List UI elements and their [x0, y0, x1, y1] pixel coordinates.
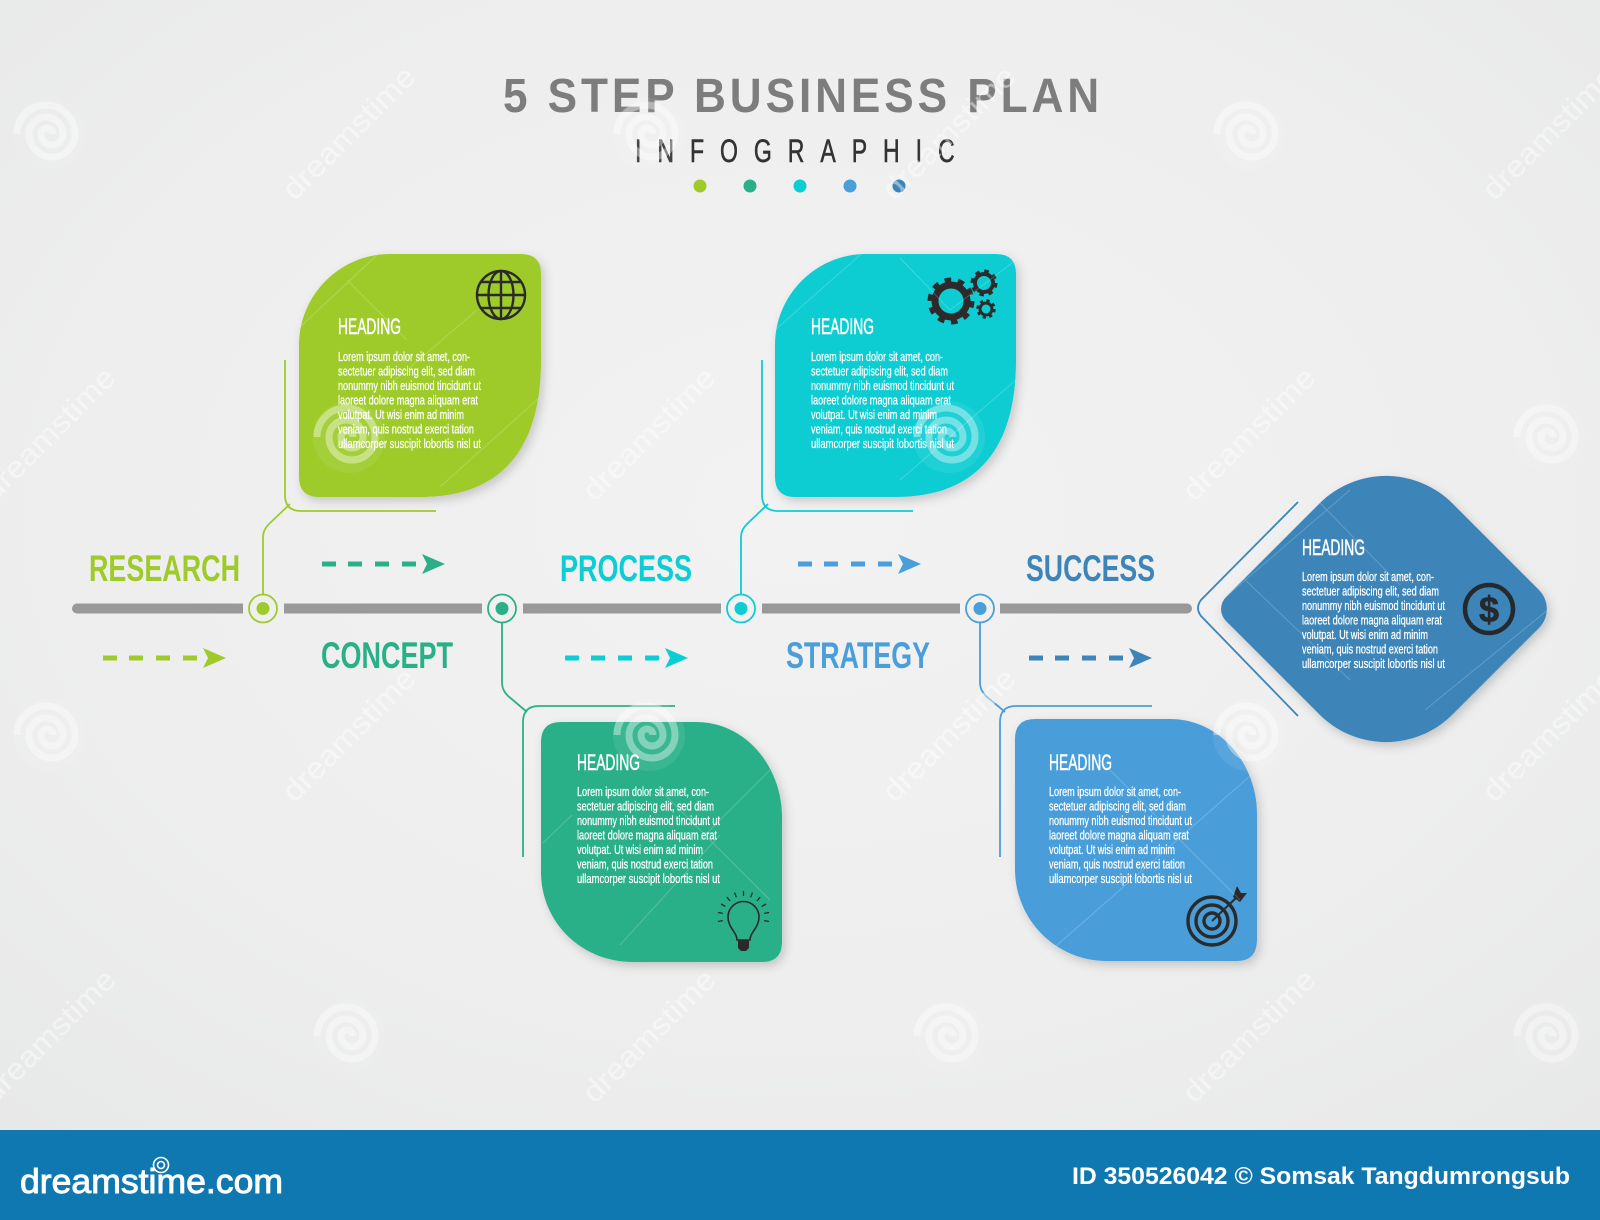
heading: HEADING [577, 750, 640, 775]
heading: HEADING [1302, 535, 1365, 560]
body text: laoreet dolore magna aliquam erat [1302, 614, 1442, 628]
body text: nonummy nibh euismod tincidunt ut [1302, 599, 1445, 613]
body text [1049, 785, 1192, 886]
panel: process card [775, 254, 1016, 497]
body text: sectetuer adipiscing elit, sed diam [577, 800, 714, 814]
body text: ullamcorper suscipit lobortis nisl ut [1049, 872, 1192, 886]
body text: ullamcorper suscipit lobortis nisl ut [811, 437, 954, 451]
label: strategy: STRATEGY [786, 635, 930, 676]
icon: globe [477, 271, 525, 319]
body text: ullamcorper suscipit lobortis nisl ut [577, 872, 720, 886]
body text [338, 350, 481, 451]
node 4 with connector [966, 594, 1152, 857]
image credit: ID 350526042 © Somsak Tangdumrongsub [1072, 1163, 1570, 1190]
body text [811, 350, 954, 451]
body text: laoreet dolore magna aliquam erat [338, 394, 478, 408]
arrow 4 [798, 554, 921, 574]
body text [1302, 570, 1445, 671]
chevron outline [1198, 502, 1298, 716]
body text: sectetuer adipiscing elit, sed diam [811, 364, 948, 378]
label: success: SUCCESS [1026, 548, 1155, 589]
heading: HEADING [1049, 750, 1112, 775]
body text: Lorem ipsum dolor sit amet, con- [1049, 785, 1181, 799]
icon: gears [930, 271, 996, 322]
body text: veniam, quis nostrud exerci tation [577, 858, 713, 872]
body text: volutpat. Ut wisi enim ad minim [811, 408, 937, 422]
body text: sectetuer adipiscing elit, sed diam [1049, 800, 1186, 814]
icon: light bulb [718, 891, 769, 951]
banner spiral logo [154, 1158, 168, 1172]
panel: strategy card [1015, 719, 1257, 961]
watermark overlay: dreamstime [1175, 360, 1323, 508]
watermark overlay: dreamstime [575, 360, 723, 508]
label: concept: CONCEPT [321, 635, 453, 676]
panel: concept card [541, 722, 782, 962]
watermark overlay: dreamstime [275, 59, 423, 207]
label: process: PROCESS [560, 548, 692, 589]
body text: veniam, quis nostrud exerci tation [338, 422, 474, 436]
subtitle: INFOGRAPHIC [635, 133, 955, 169]
watermark overlay: dreamstime [875, 661, 1023, 809]
body text: Lorem ipsum dolor sit amet, con- [1302, 570, 1434, 584]
panel: research card [299, 254, 541, 497]
body text: veniam, quis nostrud exerci tation [811, 422, 947, 436]
body text: laoreet dolore magna aliquam erat [811, 394, 951, 408]
body text: nonummy nibh euismod tincidunt ut [1049, 814, 1192, 828]
title: 5 STEP BUSINESS PLAN [503, 68, 1099, 122]
colour dots [694, 180, 906, 192]
watermark overlay: dreamstime [275, 661, 423, 809]
body text: veniam, quis nostrud exerci tation [1049, 858, 1185, 872]
body text: laoreet dolore magna aliquam erat [1049, 828, 1189, 842]
body text: ullamcorper suscipit lobortis nisl ut [338, 437, 481, 451]
body text: volutpat. Ut wisi enim ad minim [577, 843, 703, 857]
label: research: RESEARCH [89, 548, 240, 589]
body text: volutpat. Ut wisi enim ad minim [1049, 843, 1175, 857]
node 3 with connector [727, 360, 913, 622]
body text: Lorem ipsum dolor sit amet, con- [338, 350, 470, 364]
body text: nonummy nibh euismod tincidunt ut [338, 379, 481, 393]
footer banner [0, 1130, 1600, 1220]
body text [577, 785, 720, 886]
watermark overlay: dreamstime [575, 962, 723, 1110]
body text: sectetuer adipiscing elit, sed diam [1302, 584, 1439, 598]
node 2 with connector [488, 594, 675, 857]
arrow 1 [103, 648, 226, 668]
body text: Lorem ipsum dolor sit amet, con- [577, 785, 709, 799]
icon: dollar coin [1465, 585, 1513, 633]
arrow 5 [1029, 648, 1152, 668]
icon: target [1188, 886, 1247, 945]
icon: dollar coin: $ [1479, 589, 1499, 630]
body text: laoreet dolore magna aliquam erat [577, 828, 717, 842]
body text: nonummy nibh euismod tincidunt ut [811, 379, 954, 393]
heading: HEADING [811, 314, 874, 339]
arrow 3 [565, 648, 688, 668]
body text: sectetuer adipiscing elit, sed diam [338, 364, 475, 378]
heading: HEADING [338, 314, 401, 339]
body text: veniam, quis nostrud exerci tation [1302, 642, 1438, 656]
arrow 2 [322, 554, 445, 574]
node 1 with connector [249, 360, 436, 622]
body text: volutpat. Ut wisi enim ad minim [1302, 628, 1428, 642]
panel: success diamond card [1198, 476, 1547, 742]
banner logo text: dreamstime.com [20, 1163, 283, 1201]
timeline bar [72, 604, 1192, 614]
watermark overlay: dreamstime [875, 59, 1023, 207]
body text: ullamcorper suscipit lobortis nisl ut [1302, 657, 1445, 671]
watermark overlay: dreamstime [1175, 962, 1323, 1110]
body text: volutpat. Ut wisi enim ad minim [338, 408, 464, 422]
body text: nonummy nibh euismod tincidunt ut [577, 814, 720, 828]
body text: Lorem ipsum dolor sit amet, con- [811, 350, 943, 364]
